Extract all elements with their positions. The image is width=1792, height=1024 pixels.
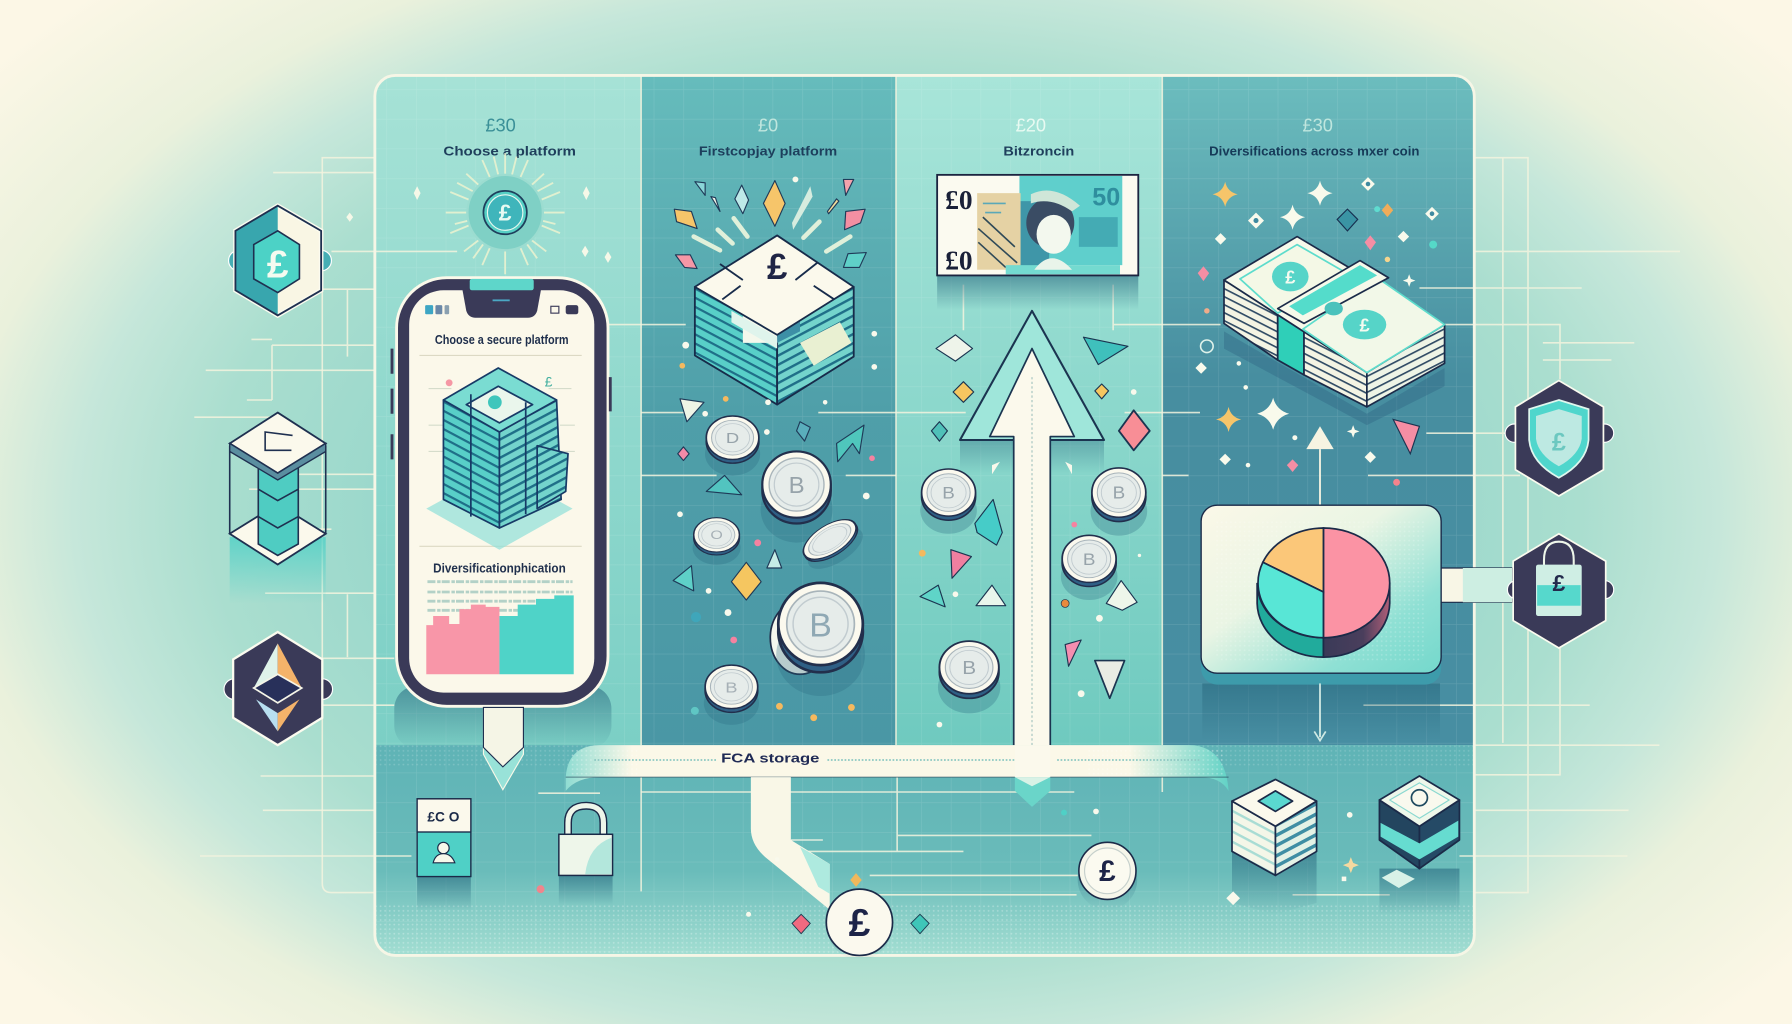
banknote: £0 <box>945 185 973 215</box>
bar chart <box>426 595 574 674</box>
icon: shield hexagon: £ <box>1552 428 1566 456</box>
price label: £20 <box>1016 114 1046 135</box>
icon: pound hexagon <box>229 206 331 315</box>
isometric stack <box>443 368 568 528</box>
elbow connector <box>751 777 830 910</box>
stack of banknotes <box>1224 237 1445 425</box>
column 2 dots <box>677 331 877 721</box>
bottom accents <box>746 809 1099 917</box>
coin 6: B <box>725 679 738 696</box>
icon: sun coin <box>346 153 611 274</box>
icon: shield hexagon <box>1505 381 1614 496</box>
notch <box>462 286 542 318</box>
coin 6 <box>704 665 759 725</box>
coin 5 large stack <box>770 583 865 696</box>
stack of banknotes: £ <box>1285 266 1295 287</box>
icon: pound hexagon: £ <box>267 244 289 287</box>
pound coin right: £ <box>1099 855 1116 888</box>
coin 7: B <box>942 484 955 502</box>
coin 10 <box>938 641 1000 713</box>
body text lines <box>427 582 573 610</box>
horizontal FCA banner <box>566 745 1229 791</box>
padlock <box>537 806 613 905</box>
pound card <box>417 799 471 911</box>
base shadow <box>426 469 573 550</box>
price label: £0 <box>758 114 778 135</box>
icon: sun coin: £ <box>499 200 512 226</box>
price label: £30 <box>485 114 516 135</box>
arrow stub below card <box>1314 683 1326 741</box>
coin 4 tilted <box>796 511 869 577</box>
icon: lock hexagon: £ <box>1552 570 1565 596</box>
phone mockup: £ <box>545 374 553 389</box>
banknote: £0 <box>945 246 973 276</box>
coin 10: B <box>962 658 976 679</box>
column 3 header <box>1003 114 1074 158</box>
column 2 background <box>641 75 896 745</box>
pound coin right <box>1078 842 1137 910</box>
price label: £30 <box>1302 114 1333 135</box>
phone heading: Choose a secure platform <box>435 332 569 347</box>
column 4 header <box>1209 114 1419 158</box>
phone mockup <box>392 278 610 706</box>
pie <box>1257 528 1390 657</box>
coin 2: B <box>789 473 805 499</box>
isometric cube with pound: £ <box>767 246 787 287</box>
heading: bitcoin: Bitzroncin <box>1003 143 1074 158</box>
column 3 background <box>896 75 1162 745</box>
icon: glass plinth <box>230 413 326 603</box>
coin 5 large stack: B <box>809 608 832 644</box>
connector lines <box>194 75 1680 895</box>
status icons <box>425 305 578 314</box>
small accent diamonds <box>792 914 929 934</box>
column 4 background <box>1162 75 1474 745</box>
column 1 header <box>443 114 576 158</box>
heading: choose a platform: Choose a platform <box>443 143 576 158</box>
isometric stack right <box>1379 776 1459 914</box>
column 2 header <box>699 114 837 158</box>
coin 9: B <box>1083 550 1095 568</box>
column 2 lower shapes <box>673 399 864 600</box>
phone screen <box>409 290 594 693</box>
coin 1 <box>705 416 760 476</box>
banknote: 50 <box>1092 184 1120 212</box>
pie chart card <box>1201 505 1512 741</box>
banner label: FCA storage <box>721 750 819 765</box>
column 2 shards <box>674 176 866 269</box>
connector to lock <box>1429 568 1512 602</box>
coin 7 <box>920 469 977 534</box>
icon: lock hexagon <box>1507 534 1614 648</box>
heading: platform: Firstcopjay platform <box>699 143 837 158</box>
bottom band background <box>375 745 1474 955</box>
coin 8: B <box>1113 483 1125 503</box>
coin 3 <box>693 518 741 565</box>
coin 9 <box>1061 535 1117 600</box>
pound card: £C O <box>427 810 460 825</box>
isometric stack left <box>1232 779 1317 914</box>
column 3 shapes <box>920 335 1150 698</box>
icon: ethereum hexagon <box>224 632 333 745</box>
arrow: phone down <box>483 707 523 790</box>
shadow under phone <box>394 686 611 749</box>
rays <box>694 218 850 251</box>
pound coin bottom <box>826 889 893 960</box>
phone subheading: Diversificationphication <box>433 561 566 576</box>
heading: diversification: Diversifications across mxer coin <box>1209 143 1419 158</box>
pound coin bottom: £ <box>849 902 871 945</box>
panel border <box>375 75 1474 955</box>
phone body <box>397 278 608 706</box>
coin 2 <box>761 451 833 543</box>
big up arrow <box>960 311 1104 745</box>
panel: main frame <box>375 75 1474 955</box>
column 1 background <box>375 75 641 745</box>
column 4 sparkles <box>1195 177 1439 486</box>
stack accents <box>1226 812 1359 905</box>
coin 3: O <box>710 528 723 542</box>
coin 8 <box>1091 468 1147 536</box>
arrow: banner tail <box>1015 745 1050 807</box>
banknote <box>937 175 1138 310</box>
column 3 markers <box>919 389 1141 727</box>
stack of banknotes: £ <box>1359 314 1370 335</box>
isometric cube with pound <box>695 235 854 405</box>
coin 1: D <box>726 430 739 447</box>
small up arrow <box>1306 426 1334 505</box>
